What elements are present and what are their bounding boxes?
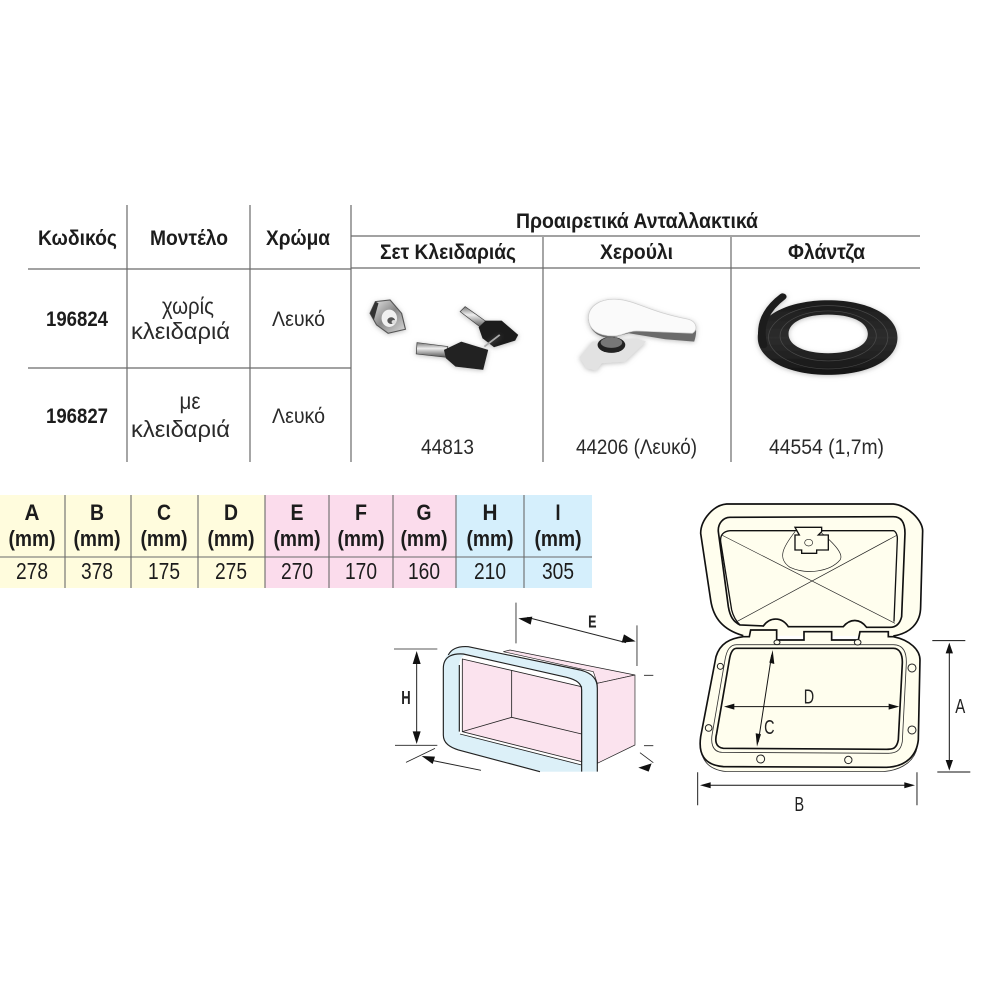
rubber coil (758, 300, 897, 375)
spare part codes: 44554 (1,7m) (769, 436, 884, 459)
column E (274, 500, 320, 584)
dimension A (932, 641, 970, 772)
row 196827: κλειδαριά (131, 416, 230, 442)
row 196824 (46, 293, 325, 344)
column D (208, 500, 254, 584)
column C: C (157, 500, 171, 525)
lid (701, 504, 923, 636)
row 196827 (46, 388, 325, 442)
dimension C (756, 650, 775, 747)
column F: F (355, 500, 367, 525)
column C: (mm) (140, 526, 188, 551)
column E: (mm) (274, 526, 320, 551)
dimensions table (0, 495, 592, 588)
photo: lock set with keys (370, 300, 518, 370)
handle base (579, 338, 646, 371)
column B: B (90, 500, 104, 525)
column I: I (556, 500, 560, 525)
column E: E (290, 500, 304, 525)
column I: 305 (542, 558, 574, 584)
column headings (38, 210, 865, 264)
column headings: Φλάντζα (788, 241, 865, 264)
table grid (28, 205, 920, 462)
column C (140, 500, 188, 584)
box diagram (394, 603, 653, 772)
column G: 160 (408, 558, 440, 584)
column A (8, 500, 56, 584)
column headings: Χερούλι (600, 241, 673, 264)
lid X lines (722, 535, 897, 623)
dimension E: E (588, 612, 597, 632)
column H: H (482, 500, 498, 525)
column headings: Προαιρετικά Ανταλλακτικά (516, 210, 758, 233)
screw holes (705, 640, 916, 764)
dimension B (698, 772, 917, 816)
column headings: Σετ Κλειδαριάς (380, 241, 516, 264)
dimension D: D (804, 685, 814, 708)
row 196824: κλειδαριά (131, 318, 230, 344)
row 196827: 196827 (46, 405, 108, 428)
spare part codes: 44206 (Λευκό) (576, 436, 697, 459)
column B: (mm) (74, 526, 120, 551)
row 196824: 196824 (46, 308, 108, 331)
column D: D (224, 500, 238, 525)
handle lever (588, 299, 696, 342)
box body (503, 650, 635, 763)
column F: 170 (345, 558, 377, 584)
frame (443, 647, 597, 772)
column I: (mm) (534, 526, 582, 551)
dimension H (394, 649, 437, 745)
row 196824: Λευκό (272, 308, 325, 331)
dimension C: C (764, 716, 775, 739)
row 196827: με (180, 388, 200, 414)
base frame (700, 630, 920, 772)
spare part codes (421, 436, 884, 459)
column H: 210 (474, 558, 506, 584)
column headings: Κωδικός (38, 227, 117, 250)
column A: 278 (16, 558, 48, 584)
dimension D (724, 685, 899, 710)
spare part codes: 44813 (421, 436, 474, 459)
table lines (0, 495, 592, 588)
frame outlines (443, 647, 597, 772)
column D: (mm) (208, 526, 254, 551)
column headings: Χρώμα (266, 227, 330, 250)
column H: (mm) (466, 526, 514, 551)
column G: (mm) (400, 526, 448, 551)
row 196827: Λευκό (272, 405, 325, 428)
product table (28, 205, 920, 462)
row 196824: χωρίς (162, 293, 214, 319)
dimension B: B (795, 793, 804, 816)
lower key (416, 335, 500, 370)
photo: handle (579, 299, 696, 371)
column E: 270 (281, 558, 313, 584)
column F: (mm) (338, 526, 384, 551)
dimension E (516, 603, 637, 666)
column A: (mm) (8, 526, 56, 551)
dimension A: A (955, 695, 965, 718)
column H (466, 500, 514, 584)
column G: G (416, 500, 432, 525)
column B: 378 (81, 558, 113, 584)
column A: A (24, 500, 40, 525)
column D: 275 (215, 558, 247, 584)
upper key (460, 307, 518, 347)
dimension H: H (401, 688, 411, 709)
column C: 175 (148, 558, 180, 584)
column B (74, 500, 120, 584)
colour bands (0, 495, 592, 588)
column headings: Μοντέλο (150, 227, 228, 250)
column I (534, 500, 582, 584)
hatch diagram (698, 504, 970, 816)
lock cylinder (370, 300, 405, 333)
dimension ticks (406, 675, 653, 772)
box interior (459, 655, 582, 772)
column G (400, 500, 448, 584)
photo: gasket (758, 297, 897, 375)
lock plate (783, 527, 841, 571)
column F (338, 500, 384, 584)
coil highlights (769, 306, 888, 369)
